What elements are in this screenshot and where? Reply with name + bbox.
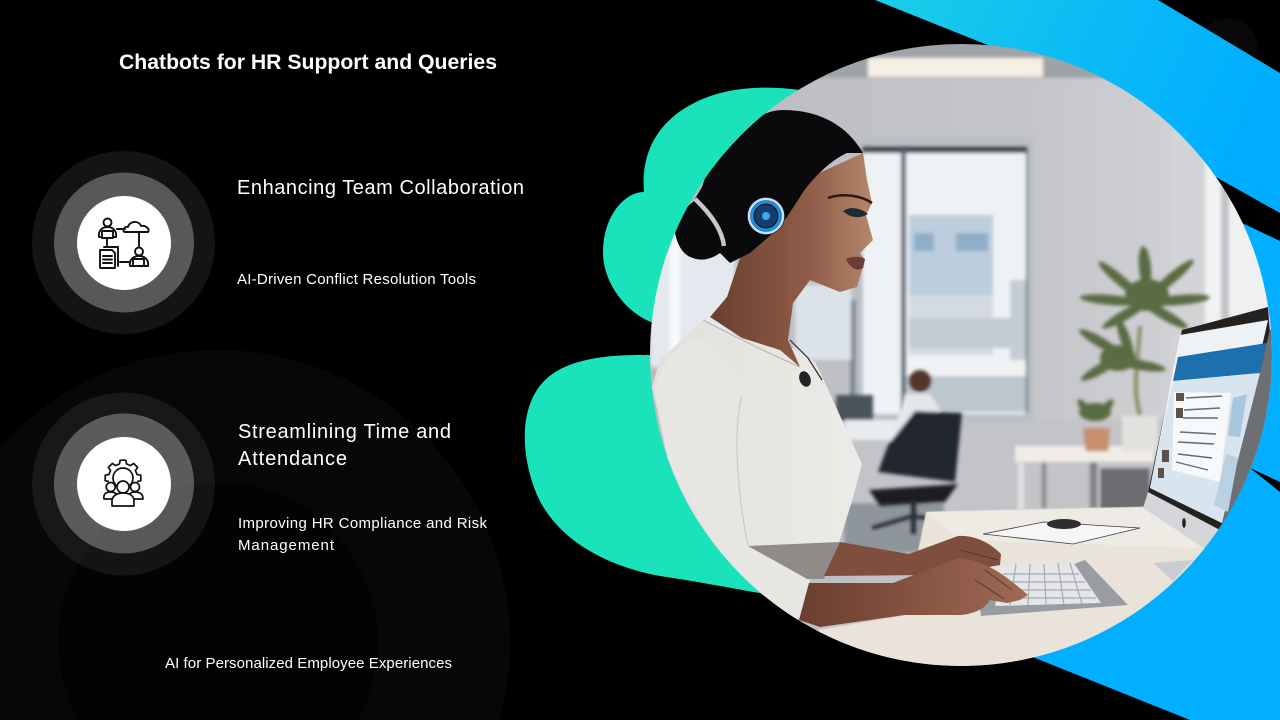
text: Improving HR Compliance and Risk Management: Management — [238, 537, 335, 554]
icon badge: people and gear — [32, 392, 215, 576]
footer text: AI for Personalized Employee Experiences — [165, 655, 452, 672]
heading: Streamlining Time and Attendance — [238, 421, 451, 470]
teal blob: lower — [525, 355, 765, 594]
blue wave: top right — [875, 0, 1280, 213]
headset — [695, 197, 785, 246]
neck and face — [710, 153, 873, 367]
hair — [675, 110, 863, 263]
text: AI-Driven Conflict Resolution Tools: AI-Driven Conflict Resolution Tools — [237, 271, 476, 288]
panel: second row — [32, 392, 488, 576]
window — [650, 136, 1034, 422]
facial features — [703, 195, 872, 388]
office background — [640, 40, 1280, 680]
heading: Streamlining Time and Attendance: Attendance — [238, 448, 347, 470]
background colleague and chair — [836, 370, 962, 534]
heading: Streamlining Time and Attendance: Streamlining Time and — [238, 421, 451, 443]
title: Chatbots for HR Support and Queries — [119, 50, 497, 74]
teal blob: upper — [603, 88, 800, 325]
keyboard — [979, 560, 1128, 616]
computer monitor — [1143, 307, 1280, 547]
desk — [816, 506, 1205, 666]
photo: woman at a desk using an AI headset — [640, 40, 1280, 700]
arms and hands — [799, 536, 1028, 627]
plants and side table — [1015, 246, 1210, 510]
text: Improving HR Compliance and Risk Management — [238, 515, 488, 554]
blue wave: right and bottom — [1030, 222, 1280, 720]
text: Improving HR Compliance and Risk Management: Improving HR Compliance and Risk — [238, 515, 488, 532]
waist band and sleeve — [667, 395, 840, 618]
black wedge on the right edge — [1250, 468, 1280, 492]
icon badge: team collaboration — [32, 151, 215, 334]
shirt — [652, 320, 862, 620]
heading: Enhancing Team Collaboration: Enhancing Team Collaboration — [237, 177, 524, 199]
panel: first row — [32, 151, 524, 334]
